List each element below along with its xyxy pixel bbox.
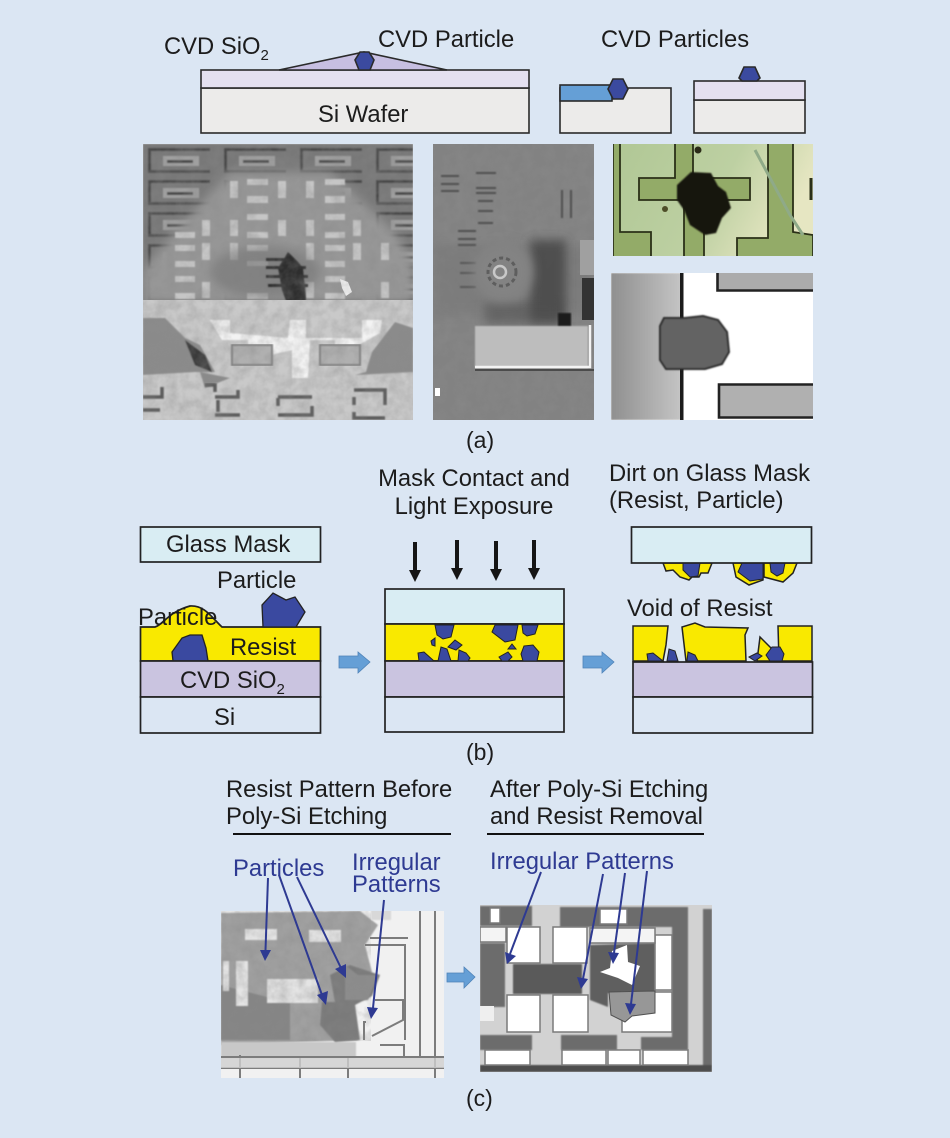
- arrow: irregular 4: [625, 871, 647, 1015]
- photo: green micrograph with black particle: [613, 143, 813, 257]
- glass mask: Glass Mask: [166, 531, 290, 558]
- label: CVD Particles: CVD Particles: [601, 26, 749, 53]
- arrow: irregular 3: [608, 873, 625, 964]
- heading: resist pattern before etching: [226, 776, 452, 835]
- SiO2 layer: 2: [277, 681, 285, 698]
- photo: resist pattern before etching: [221, 905, 444, 1078]
- photo: pattern after etching and resist removal: [480, 905, 712, 1072]
- label: Irregular Patterns: Irregular: [352, 849, 441, 876]
- glass mask: [140, 527, 320, 562]
- particles embedded in resist: [418, 625, 539, 661]
- arrow: irregular patterns: [367, 900, 384, 1019]
- heading: resist pattern before etching: Resist Pattern Before: [226, 776, 452, 803]
- heading: after etching: and Resist Removal: [490, 803, 703, 830]
- arrow: irregular 2: [577, 874, 603, 989]
- heading: dirt on glass mask: (Resist, Particle): [609, 487, 784, 514]
- label: CVD Particle: CVD Particle: [378, 26, 514, 53]
- arrow: step 1 to 2: [339, 652, 370, 673]
- heading: mask contact: Mask Contact and: [378, 465, 570, 492]
- arrow: particles 3: [297, 877, 346, 978]
- label: Particle lower: Particle: [138, 604, 217, 631]
- label: CVD SiO2: CVD SiO: [164, 33, 261, 60]
- particle in resist: [172, 635, 208, 661]
- Si layer: Si: [214, 704, 235, 731]
- label: Resist: Resist: [230, 634, 297, 661]
- resist layer with bump: [140, 606, 320, 661]
- panel a: CVD particle cross-section diagrams: [164, 26, 805, 133]
- photo: micrograph of large defect on circuit pattern: [143, 144, 413, 420]
- heading: dirt on glass mask: Dirt on Glass Mask: [609, 460, 810, 487]
- SiO2 layer: [140, 661, 320, 698]
- panel b: step 3 mask with dirt: [632, 527, 812, 585]
- label: Particle upper: Particle: [217, 567, 296, 594]
- blue labels and arrows: right photo: [490, 848, 674, 1015]
- exposure arrows: [409, 540, 540, 582]
- SiO2 layer: CVD SiO: [180, 667, 277, 694]
- label: Irregular Patterns: Patterns: [352, 871, 441, 898]
- arrow: before to after: [447, 967, 475, 988]
- caption (a): (a): [466, 427, 494, 453]
- caption (c): (c): [466, 1085, 493, 1111]
- label: Si Wafer: Si Wafer: [318, 101, 408, 128]
- photo: grey micrograph of bridging particle on white: [611, 273, 813, 420]
- panel b: step 3 stack with resist voids: [633, 623, 812, 733]
- panel b: step 1 stack with glass mask: [138, 527, 320, 733]
- Si layer: [140, 697, 320, 733]
- arrow: particles 1: [260, 878, 271, 961]
- label: Irregular Patterns: Irregular Patterns: [490, 848, 674, 875]
- heading: mask contact: Light Exposure: [395, 493, 553, 520]
- photo: micrograph of round particle in oxide: [433, 144, 594, 420]
- blue labels and arrows: left photo: [233, 849, 441, 1019]
- diagram: particle at edge of patterned film: [560, 79, 671, 133]
- diagram: particle sitting on film: [694, 67, 805, 133]
- heading: after etching: [487, 776, 708, 835]
- heading: resist pattern before etching: Poly-Si Etching: [226, 803, 387, 830]
- heading: after etching: After Poly-Si Etching: [490, 776, 708, 803]
- arrow: particles 2: [279, 875, 328, 1005]
- label: Particles: Particles: [233, 855, 324, 882]
- particle on resist: [262, 593, 305, 627]
- label: CVD SiO2: 2: [261, 47, 269, 64]
- arrow: step 2 to 3: [583, 652, 614, 673]
- panel b: step 2 stack in mask contact: [385, 589, 564, 732]
- arrow: irregular 1: [505, 872, 541, 964]
- diagram: Si wafer with conformal oxide over particle: [201, 52, 529, 133]
- label: Void of Resist: Void of Resist: [627, 595, 773, 622]
- caption (b): (b): [466, 739, 494, 765]
